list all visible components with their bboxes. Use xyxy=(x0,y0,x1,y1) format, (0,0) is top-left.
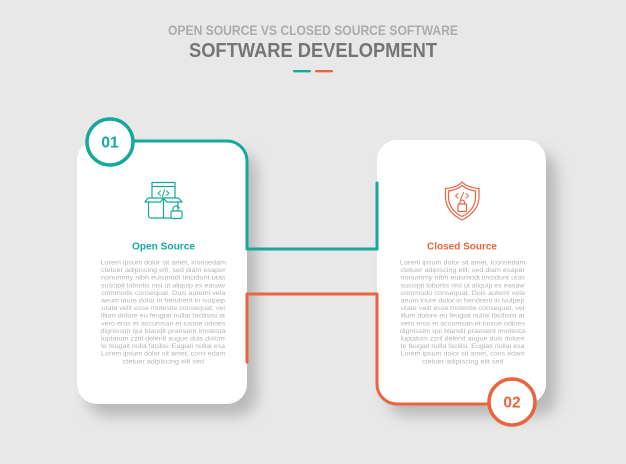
badge: 01: 01 xyxy=(101,134,119,152)
card heading: closed source: Closed Source xyxy=(427,242,497,252)
body text: open source: commodo consequat. Duis autemi vela xyxy=(101,290,226,297)
body text: open source: ctetuer adipiscing elit, sed diam esaper xyxy=(101,267,226,274)
title accent: teal dash xyxy=(293,70,311,72)
body text: open source: Lorem ipsum dolor sit amet, iconsedam xyxy=(101,260,227,266)
body text: open source: te feugait nulla facilisi. Eugiati nullai esa xyxy=(101,343,225,350)
badge: 01 xyxy=(87,119,133,165)
body text: closed source: dignissim qui blandit praesent imolesta xyxy=(400,328,526,335)
panel: open source card xyxy=(77,140,257,416)
body text: closed source xyxy=(400,260,526,365)
icon: shield with code and padlock xyxy=(446,182,479,220)
card shadow xyxy=(387,152,557,416)
body text: open source: illum dolore eu feugiat nullai facilisisi at xyxy=(101,313,225,320)
card body xyxy=(77,140,247,404)
body text: open source: Lorem ipsum dolor sit amet, cons edam xyxy=(101,351,226,358)
connector: teal line from badge 01 to closed source card xyxy=(130,141,377,249)
body text: closed source: commodo consequat. Duis autemi vela xyxy=(401,290,525,297)
main heading: SOFTWARE DEVELOPMENT xyxy=(189,40,437,62)
badge: 02: 02 xyxy=(503,394,521,412)
body text: open source: luptatum zzril delenit augue duis dolore xyxy=(101,336,225,342)
body text: closed source: luptatum zzril delenit augue duis dolore xyxy=(400,336,525,342)
body text: closed source: illum dolore eu feugiat nullai facilisisi at xyxy=(400,313,525,320)
body text: closed source: suscipit lobortis nisl ut aliquip ex easaw xyxy=(400,282,525,289)
body text: closed source: nonummy nibh euismodi tincidunt utas xyxy=(400,275,526,282)
body text: closed source: ctetuer adipiscing elit sed xyxy=(422,358,504,365)
card body xyxy=(377,140,546,404)
body text: open source: suscipit lobortis nisl ut aliquip ex easaw xyxy=(101,282,225,289)
body text: open source xyxy=(100,260,227,365)
body text: closed source: ctetuer adipiscing elit, sed diam esaper xyxy=(400,267,526,274)
card shadow xyxy=(87,152,257,416)
body text: open source: utate velit esse molestie consequat, vel xyxy=(102,305,226,312)
body text: closed source: utate velit esse molestie consequat, vel xyxy=(401,305,525,312)
connector: orange line from open source card to badge 02 xyxy=(247,294,495,404)
body text: open source: aeum iriure dolor in hendrerit in ivulpep xyxy=(101,298,225,304)
icon: open box with code window and unlocked padlock xyxy=(145,182,182,218)
title block xyxy=(168,23,458,72)
subtitle: OPEN SOURCE VS CLOSED SOURCE SOFTWARE xyxy=(168,23,458,38)
badge: 02 xyxy=(489,379,535,425)
body text: closed source: Lorem ipsum dolor sit amet, cons edam xyxy=(400,351,525,358)
body text: open source: vero eros et accumsan et iustoe odioes xyxy=(101,320,226,327)
card heading: open source: Open Source xyxy=(132,242,195,252)
body text: closed source: Lorem ipsum dolor sit amet, iconsedam xyxy=(400,260,526,266)
body text: closed source: aeum iriure dolor in hendrerit in ivulpep xyxy=(400,298,525,304)
body text: closed source: vero eros et accumsan et iustoe odioes xyxy=(400,320,526,327)
body text: open source: dignissim qui blandit praesent imolesta xyxy=(100,328,226,335)
panel: closed source card xyxy=(377,140,557,416)
body text: open source: nonummy nibh euismodi tincidunt utas xyxy=(101,275,226,282)
title accent: orange dash xyxy=(315,70,333,72)
body text: closed source: te feugait nulla facilisi. Eugiati nullai esa xyxy=(400,343,525,350)
body text: open source: ctetuer adipiscing elit sed xyxy=(123,358,204,365)
